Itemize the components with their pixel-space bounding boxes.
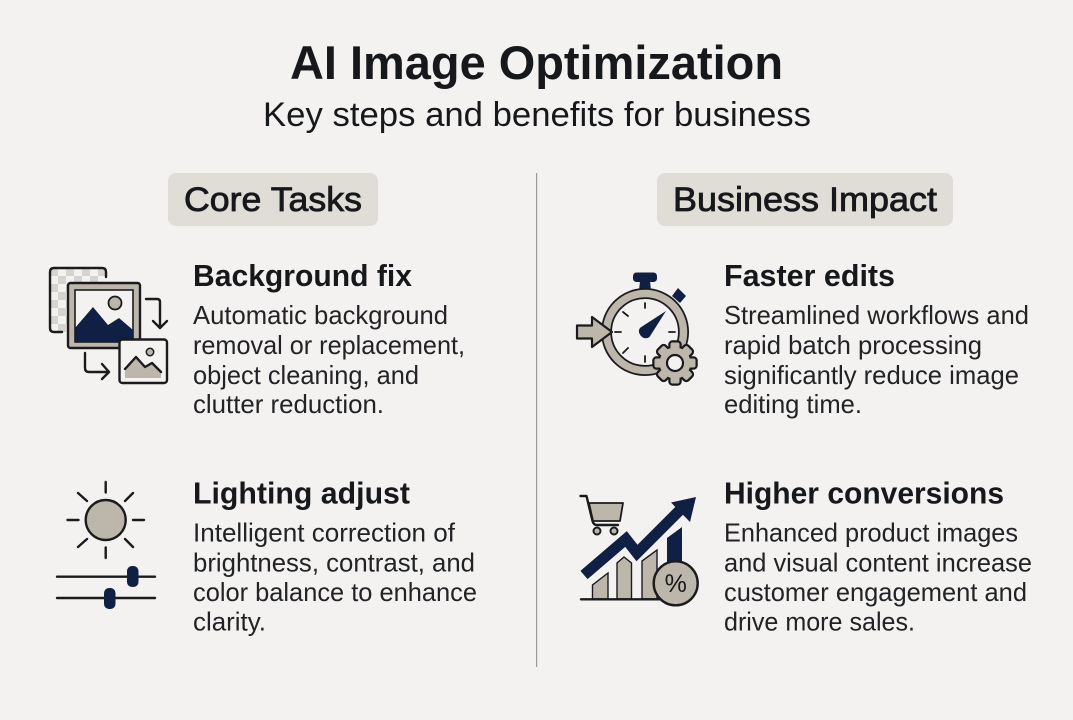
text: faster edits: Faster edits	[724, 259, 895, 293]
title: AI Image Optimization	[290, 36, 783, 89]
text: background fix	[193, 259, 465, 419]
heading: Business Impact	[657, 173, 953, 226]
text: background fix: Automatic background	[193, 300, 448, 330]
text: background fix: Background fix	[193, 259, 412, 293]
icon: lighting adjust	[57, 482, 155, 609]
text: background fix: clutter reduction.	[193, 389, 384, 419]
heading: Business Impact: Business Impact	[673, 181, 938, 219]
text: faster edits	[724, 259, 1029, 419]
text: lighting adjust: color balance to enhance	[193, 577, 477, 607]
text: faster edits: Streamlined workflows and	[724, 300, 1029, 330]
heading: Core Tasks	[168, 173, 378, 226]
text: faster edits: rapid batch processing	[724, 330, 982, 360]
text: higher conversions: Higher conversions	[724, 476, 1004, 510]
text: higher conversions: drive more sales.	[724, 606, 915, 636]
text: higher conversions: customer engagement and	[724, 577, 1027, 607]
icon: conversions chart	[580, 496, 698, 605]
text: lighting adjust: clarity.	[193, 606, 266, 636]
icon: stopwatch	[577, 272, 696, 384]
heading: Core Tasks: Core Tasks	[184, 181, 362, 219]
text: lighting adjust: Lighting adjust	[193, 476, 410, 510]
text: background fix: removal or replacement,	[193, 330, 465, 360]
text: background fix: object cleaning, and	[193, 360, 419, 390]
text: lighting adjust: Intelligent correction of	[193, 518, 456, 548]
text: higher conversions: Enhanced product images	[724, 518, 1018, 548]
icon: background fix	[50, 268, 167, 383]
text: higher conversions: and visual content increase	[724, 548, 1032, 578]
text: lighting adjust: brightness, contrast, and	[193, 548, 475, 578]
text: faster edits: editing time.	[724, 389, 862, 419]
subtitle: Key steps and benefits for business	[263, 96, 811, 134]
text: higher conversions	[724, 476, 1032, 636]
text: faster edits: significantly reduce image	[724, 360, 1019, 390]
text: lighting adjust	[193, 476, 477, 636]
icon: conversions chart: %	[665, 570, 687, 598]
